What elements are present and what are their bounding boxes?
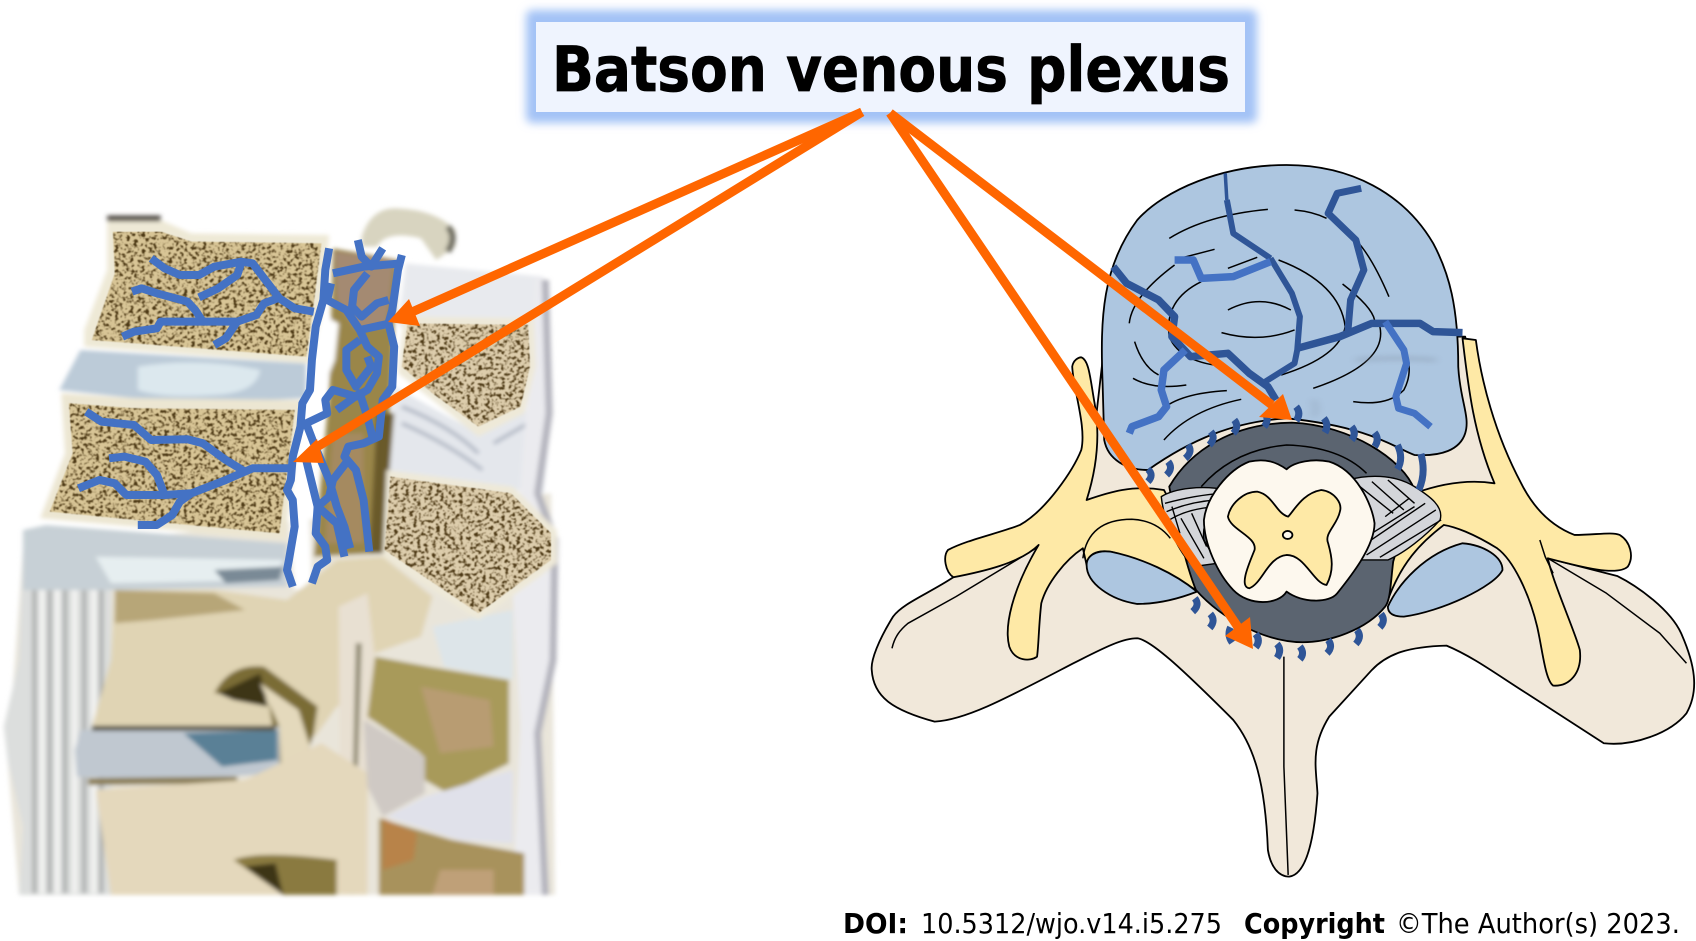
arrow to lumbar canal lower <box>293 112 862 463</box>
vertebral bone <box>872 337 1694 877</box>
DOI value: 10.5312/wjo.v14.i5.275 <box>921 907 1222 940</box>
disc annulus lines <box>1129 209 1409 440</box>
vertebral rim A <box>84 220 329 363</box>
title glow <box>526 10 1257 123</box>
anterior ligament left <box>4 550 111 895</box>
lilac facet <box>364 720 425 817</box>
disc / vertebral body <box>1102 165 1467 470</box>
right edge ligament <box>513 277 557 895</box>
posterior elements upper <box>92 557 432 770</box>
venous plexus drawing <box>78 240 402 587</box>
upper vertebra veins <box>122 258 314 345</box>
lower vertebra veins <box>78 412 291 525</box>
left yellow articular process <box>945 357 1196 660</box>
upper disc <box>59 350 306 402</box>
spinal canal <box>314 248 398 557</box>
copyright value: ©The Author(s) 2023. <box>1396 907 1680 940</box>
right blue foraminal oval <box>1388 543 1503 617</box>
panel: axial vertebra cross-section <box>872 165 1694 877</box>
body veins <box>1113 173 1463 433</box>
right upper light tissue <box>398 263 547 327</box>
lower right light tissue <box>432 610 513 680</box>
bone inner lines <box>892 548 1686 875</box>
arrow to anterior epidural plexus <box>890 113 1292 420</box>
orange arrows <box>293 112 1292 649</box>
central canal <box>1283 531 1292 539</box>
lower anterior disc <box>23 525 287 590</box>
right yellow articular process <box>1388 338 1631 686</box>
epidural venous ticks <box>1148 407 1423 659</box>
title box <box>526 10 1257 123</box>
title background <box>536 22 1245 112</box>
cancellous bone texture <box>50 232 551 613</box>
vertebral rim D <box>383 470 557 620</box>
light veins <box>1129 260 1431 433</box>
dark veins <box>1113 173 1463 400</box>
left blue foraminal oval <box>1087 551 1197 604</box>
copyright label: Copyright <box>1244 907 1385 940</box>
lower right olive <box>379 818 524 895</box>
tissue base <box>8 493 555 895</box>
dural sac <box>1169 423 1415 642</box>
lower posterior body <box>96 743 367 895</box>
mastoid top <box>362 208 455 260</box>
white slits <box>308 317 339 403</box>
panel: sagittal spine illustration <box>4 208 557 895</box>
right olive elements <box>367 657 509 793</box>
smudges on disc <box>1313 358 1436 417</box>
vertebral rim C <box>398 317 536 437</box>
DOI and copyright line <box>843 907 1680 940</box>
lower disc <box>75 727 279 780</box>
right nerve rootlets <box>1348 476 1441 560</box>
longitudinal canal veins <box>287 240 402 587</box>
spinal cord grey matter <box>1228 490 1340 588</box>
vertebral rim B <box>40 393 302 540</box>
right mid light tissue <box>387 387 551 493</box>
photo-like spine tissue <box>4 208 557 895</box>
arrow to lumbar canal upper <box>388 112 862 326</box>
yellow process arch lines <box>1083 519 1553 573</box>
title text: Batson venous plexus <box>552 33 1230 106</box>
spinal cord white matter <box>1204 460 1375 602</box>
DOI label: DOI: <box>843 907 908 940</box>
arrow to posterior epidural plexus <box>890 113 1253 649</box>
facet column <box>339 593 375 895</box>
left nerve rootlets <box>1161 488 1228 567</box>
